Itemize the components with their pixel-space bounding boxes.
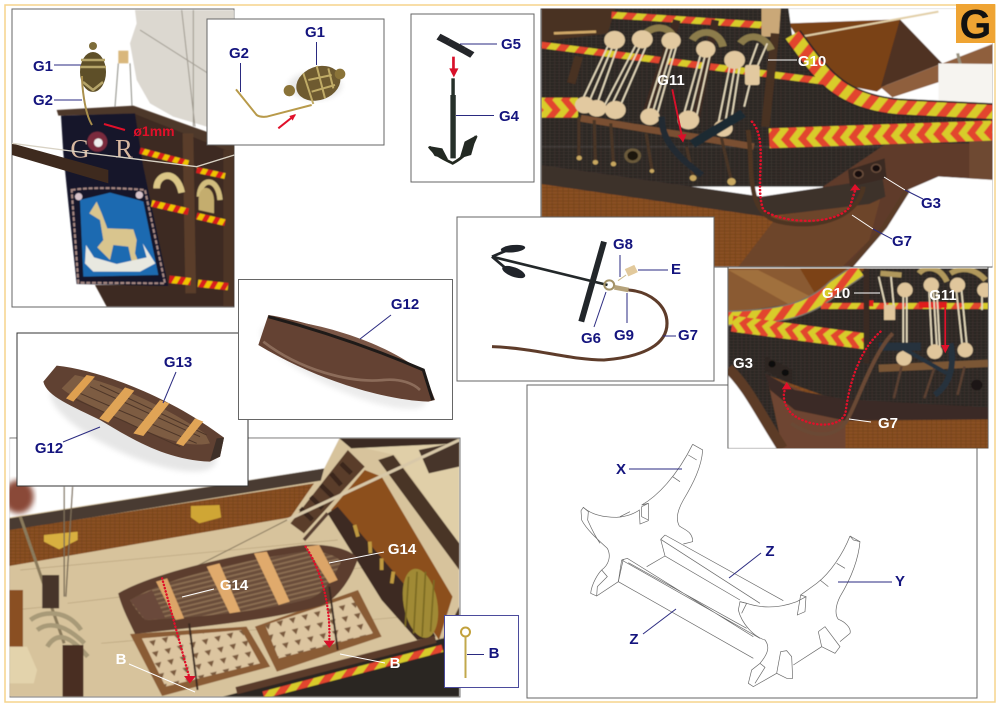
leader G13 xyxy=(163,372,176,403)
panel: hull side photo with anchor rigging xyxy=(541,8,996,267)
panel: stern with lantern and banner xyxy=(12,9,234,307)
label G1: G1 xyxy=(33,58,53,75)
leader G5 xyxy=(460,43,497,45)
leader B right xyxy=(340,654,385,663)
label G2: G2 xyxy=(33,92,53,109)
label B left: B xyxy=(116,651,127,668)
label G7: G7 xyxy=(878,415,898,432)
leader G2 xyxy=(240,63,242,92)
label G2: G2 xyxy=(229,45,249,62)
icon: boat hull xyxy=(252,309,435,425)
panel: eyelet pin B xyxy=(444,616,518,688)
icon: boat interior xyxy=(40,364,227,489)
deck photo xyxy=(3,438,459,697)
leader G9 xyxy=(626,293,628,323)
leader G12 xyxy=(360,315,391,339)
leader G7 xyxy=(852,215,873,229)
panel: boat hull xyxy=(238,280,452,425)
label G14 centre: G14 xyxy=(220,577,249,594)
leader G10 xyxy=(768,59,797,61)
label G7: G7 xyxy=(678,327,698,344)
label G12: G12 xyxy=(35,440,63,457)
leader Z upper xyxy=(729,553,761,578)
panel: lantern detail xyxy=(207,19,384,145)
icon: lantern G1 on stern xyxy=(80,42,106,125)
panel: hull inset with anchor seen from other side xyxy=(728,267,993,448)
label G10: G10 xyxy=(822,285,850,302)
badge: step letter G: G xyxy=(960,1,991,47)
line drawing: stand parts X, Y, Z xyxy=(581,444,860,687)
label G13: G13 xyxy=(164,354,192,371)
leader G7 xyxy=(849,419,871,422)
icon: lantern and wire xyxy=(236,60,345,128)
label Z lower: Z xyxy=(629,631,639,648)
leader G1 xyxy=(316,42,318,65)
panel: anchor with rope xyxy=(457,217,714,381)
label Y: Y xyxy=(895,573,905,590)
label Z upper: Z xyxy=(765,543,775,560)
label G14 right: G14 xyxy=(388,541,417,558)
leader G10 xyxy=(854,292,880,294)
label G11: G11 xyxy=(657,72,685,89)
panel: anchor parts xyxy=(411,14,534,182)
leader Y xyxy=(838,581,892,583)
label G10: G10 xyxy=(798,53,826,70)
label G11: G11 xyxy=(929,287,957,304)
label B right: B xyxy=(390,655,401,672)
icon: eyelet pin xyxy=(461,628,470,678)
label G3: G3 xyxy=(733,355,753,372)
leader B xyxy=(467,654,484,656)
label G6: G6 xyxy=(581,330,601,347)
label G9: G9 xyxy=(614,327,634,344)
label E: E xyxy=(671,261,681,278)
leader G3 xyxy=(884,177,905,190)
leader B left xyxy=(129,664,195,692)
leader E xyxy=(638,269,668,271)
label G3: G3 xyxy=(921,195,941,212)
stern photo xyxy=(12,10,234,307)
label G4: G4 xyxy=(499,108,520,125)
label G1: G1 xyxy=(305,24,325,41)
leader X xyxy=(629,468,682,470)
label G7: G7 xyxy=(892,233,912,250)
leader G14 right xyxy=(329,552,384,563)
leader G4 xyxy=(456,114,494,116)
leader G6 xyxy=(594,292,606,327)
leader Z lower xyxy=(643,609,676,634)
panel: assembly stand drawing xyxy=(527,385,977,698)
label G5: G5 xyxy=(501,36,521,53)
hull photo xyxy=(542,8,996,267)
label diameter: ø1mm xyxy=(133,123,175,139)
label G12: G12 xyxy=(391,296,419,313)
leader G2 xyxy=(54,99,82,101)
panel: deck photo with boat xyxy=(3,438,460,697)
leader G8 xyxy=(619,255,621,277)
icon: assembled anchor and rope xyxy=(492,242,667,360)
leader G14 centre xyxy=(182,589,214,597)
leader G7 xyxy=(663,335,676,337)
label B: B xyxy=(489,645,500,662)
icon: anchor G4 and stock G5 xyxy=(428,37,477,163)
leader G12 xyxy=(63,427,100,442)
label G8: G8 xyxy=(613,236,633,253)
label X: X xyxy=(616,461,626,478)
inset photo xyxy=(728,268,993,448)
stern photo: R xyxy=(115,133,133,163)
arrow to wire hole xyxy=(104,124,125,130)
leader G1 xyxy=(54,64,81,66)
stern photo: G xyxy=(70,133,90,163)
panel: boat interior xyxy=(17,333,248,489)
